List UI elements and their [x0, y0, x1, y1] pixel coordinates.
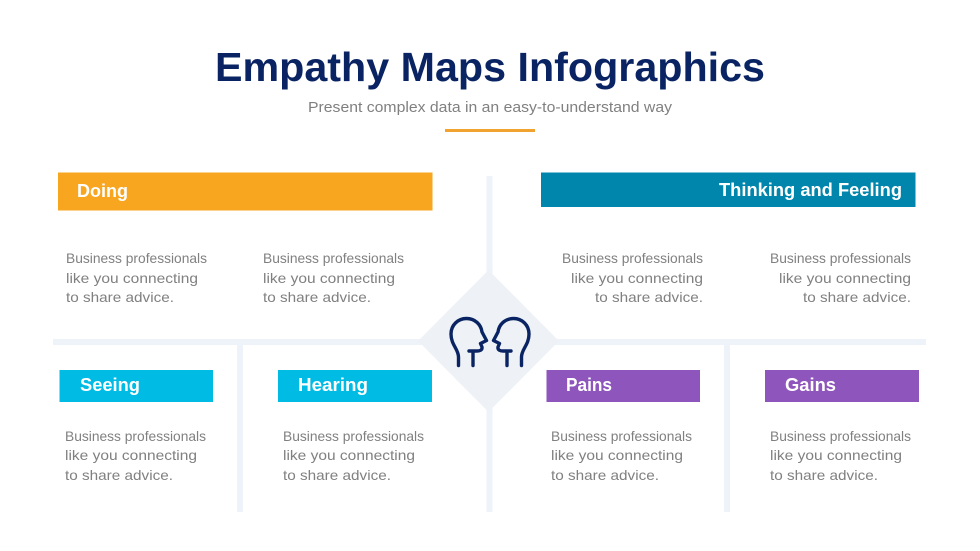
panel: Gains: Business professionals	[770, 429, 911, 444]
panel: Gains: like you connecting	[770, 448, 902, 463]
panel: Pains: Pains	[566, 375, 612, 395]
panel: Thinking and Feeling: like you connecting	[779, 271, 911, 286]
panel: Doing	[58, 172, 432, 305]
icon: two facing heads	[451, 318, 529, 366]
panel: Doing: to share advice.	[66, 290, 174, 305]
panel: Doing: Business professionals	[66, 251, 207, 266]
panel: Pains: like you connecting	[551, 448, 683, 463]
panel: Hearing: like you connecting	[283, 448, 415, 463]
panel: Seeing: Business professionals	[65, 429, 206, 444]
panel: Thinking and Feeling: Business professionals	[770, 251, 911, 266]
connector lines	[53, 176, 926, 512]
panel: Doing: to share advice.	[263, 290, 371, 305]
panel: Thinking and Feeling: to share advice.	[803, 290, 911, 305]
panel: Pains	[546, 370, 700, 483]
panel: Gains	[765, 370, 919, 483]
panel: Hearing	[278, 370, 432, 483]
subtitle: Present complex data in an easy-to-understand way	[308, 99, 673, 116]
panel: Thinking and Feeling: like you connecting	[571, 271, 703, 286]
panel: Gains: Gains	[785, 375, 836, 395]
panel: Thinking and Feeling: to share advice.	[595, 290, 703, 305]
panel: Hearing: to share advice.	[283, 468, 391, 483]
panel: Doing: Doing	[77, 181, 128, 201]
panel: Seeing	[60, 370, 213, 483]
panel: Gains: to share advice.	[770, 468, 878, 483]
panel: Pains: to share advice.	[551, 468, 659, 483]
title accent rule	[445, 129, 535, 132]
panel: Doing: like you connecting	[263, 271, 395, 286]
panel: Hearing: Business professionals	[283, 429, 424, 444]
panel: Doing: like you connecting	[66, 271, 198, 286]
panel: Thinking and Feeling: Thinking and Feeling	[719, 180, 902, 200]
panel: Seeing: like you connecting	[65, 448, 197, 463]
panel: Pains: Business professionals	[551, 429, 692, 444]
center diamond	[418, 270, 559, 412]
panel: Seeing: Seeing	[80, 375, 140, 395]
panel: Hearing: Hearing	[298, 375, 368, 395]
panel: Seeing: to share advice.	[65, 468, 173, 483]
title: Empathy Maps Infographics	[215, 44, 765, 90]
panel: Doing: Business professionals	[263, 251, 404, 266]
panel: Thinking and Feeling: Business professionals	[562, 251, 703, 266]
panel: Thinking and Feeling	[541, 172, 916, 305]
